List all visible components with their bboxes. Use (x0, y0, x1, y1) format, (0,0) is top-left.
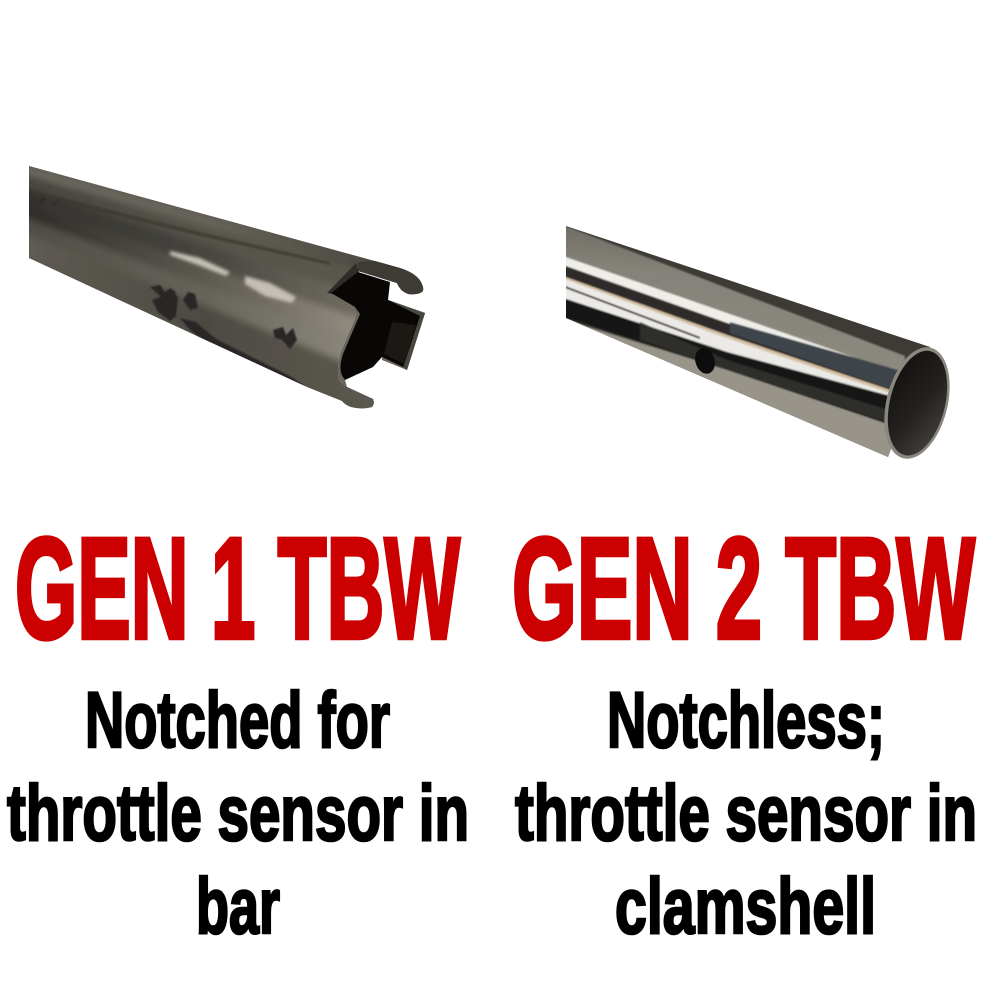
heading: gen 1: GEN 1 TBW (15, 508, 460, 669)
dark line on upper pipe (60, 198, 330, 265)
black interior (331, 272, 425, 380)
lower cut rim (338, 307, 360, 387)
text block: gen 2 description: Notchless; (607, 675, 885, 764)
notched end cavity (327, 261, 425, 387)
highlights on pipe (170, 251, 296, 303)
text block: gen 1 description: throttle sensor in (7, 768, 469, 857)
panel: gen 1 notched bar photo (29, 166, 425, 408)
pipe body: gen 1 (29, 166, 424, 408)
panel: gen 2 notchless bar photo (566, 226, 950, 459)
wear marks on pipe (40, 185, 305, 386)
pipe body: gen 2 (566, 226, 930, 457)
text block: gen 2 description (515, 675, 977, 950)
open pipe end (874, 340, 960, 466)
hole in pipe (692, 346, 718, 376)
text block: gen 1 description: bar (196, 861, 280, 950)
upper rim (358, 261, 423, 294)
inner wall of prong (384, 322, 416, 364)
text block: gen 2 description: clamshell (615, 861, 876, 950)
text block: gen 1 description (7, 675, 469, 950)
text block: gen 1 description: Notched for (85, 675, 390, 764)
